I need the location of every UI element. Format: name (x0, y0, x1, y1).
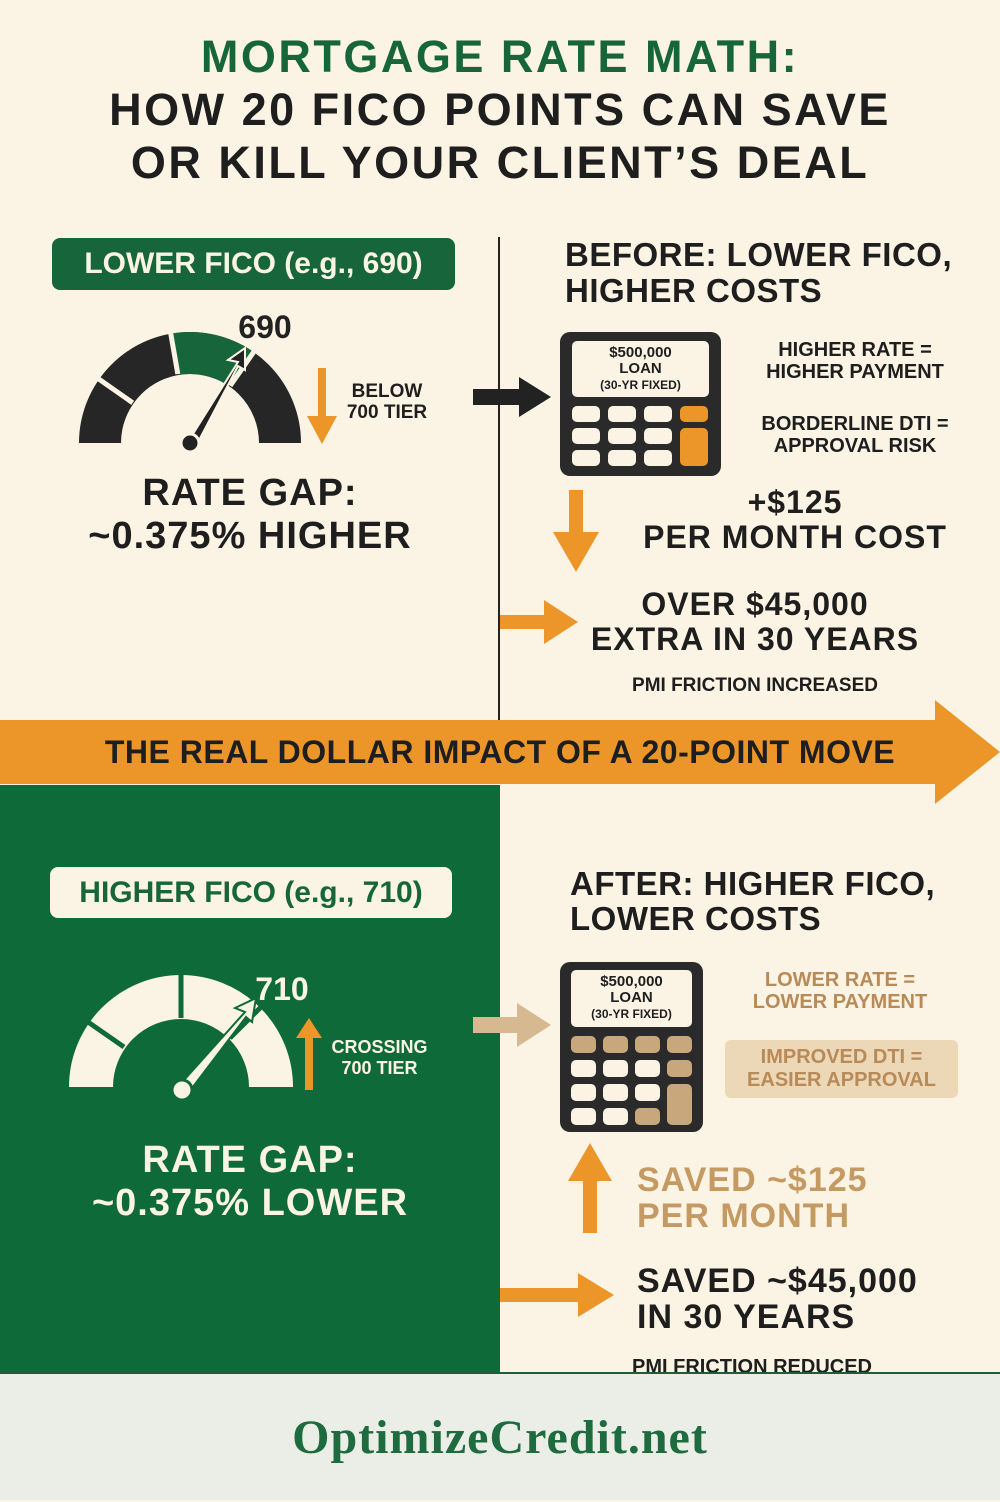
text: rate gap lower: RATE GAP: (142, 1139, 358, 1181)
text: higher rate: HIGHER PAYMENT (766, 361, 944, 383)
arrow: to calculator (473, 377, 551, 417)
icon: calculator after: (30-YR FIXED) (591, 1007, 672, 1021)
icon: calculator after: LOAN (610, 989, 653, 1006)
text: below 700 tier (347, 381, 427, 423)
heading: after: AFTER: HIGHER FICO, (570, 865, 935, 902)
text: per month cost (643, 484, 947, 555)
icon: calculator before: (30-YR FIXED) (600, 378, 681, 392)
title: HOW 20 FICO POINTS CAN SAVE (109, 84, 891, 135)
text: over 45000: OVER $45,000 (641, 586, 869, 622)
arrow: tan to calculator (473, 1003, 551, 1047)
text: pmi increased: PMI FRICTION INCREASED (632, 675, 878, 696)
pill: lower fico (52, 238, 455, 290)
text: per month cost: PER MONTH COST (643, 519, 947, 555)
arrow: down cost (553, 490, 599, 572)
title: OR KILL YOUR CLIENT’S DEAL (131, 137, 869, 188)
text: higher rate: HIGHER RATE = (778, 339, 932, 361)
pill: higher fico: HIGHER FICO (e.g., 710) (79, 876, 423, 909)
banner text: THE REAL DOLLAR IMPACT OF A 20-POINT MOVE (105, 734, 895, 770)
text: saved 45000: IN 30 YEARS (637, 1298, 855, 1336)
text: lower rate: LOWER RATE = (765, 969, 915, 991)
heading: before (565, 236, 952, 309)
banner arrow (0, 700, 1000, 804)
text: saved per month: PER MONTH (637, 1197, 850, 1235)
icon: calculator after: $500,000 (600, 973, 663, 990)
callout: improved dti (725, 1040, 958, 1098)
text: rate gap lower: ~0.375% LOWER (92, 1182, 408, 1224)
text: saved per month: SAVED ~$125 (637, 1161, 868, 1199)
icon: gauge 690 (79, 309, 301, 450)
arrow: right extra (500, 600, 578, 644)
text: crossing tier: CROSSING (331, 1037, 428, 1057)
arrow: up saved (568, 1143, 612, 1233)
heading: after: LOWER COSTS (570, 900, 821, 937)
text: rate gap higher: RATE GAP: (142, 472, 358, 514)
footer: OptimizeCredit.net (292, 1411, 708, 1464)
arrow: up crossing (296, 1018, 322, 1090)
text: over 45000: EXTRA IN 30 YEARS (591, 621, 919, 657)
icon: gauge 710: 710 (255, 971, 309, 1007)
pill: lower fico: LOWER FICO (e.g., 690) (84, 247, 423, 280)
text: borderline dti: BORDERLINE DTI = (761, 413, 949, 435)
text: saved per month (637, 1161, 868, 1235)
text: below 700 tier: BELOW (352, 381, 422, 402)
icon: calculator before: LOAN (619, 360, 662, 377)
icon: gauge 690: 690 (238, 309, 292, 345)
bottom green panel (0, 785, 500, 1375)
text: below 700 tier: 700 TIER (347, 402, 427, 423)
text: saved 45000: SAVED ~$45,000 (637, 1262, 918, 1300)
text: saved 45000 (637, 1262, 918, 1336)
text: pmi reduced: PMI FRICTION REDUCED (632, 1356, 872, 1378)
icon: calculator before: $500,000 (609, 344, 672, 361)
text: borderline dti (761, 413, 949, 457)
text: rate gap lower (92, 1139, 408, 1224)
heading: before: HIGHER COSTS (565, 272, 822, 309)
footer (0, 1372, 1000, 1500)
icon: calculator before (560, 332, 721, 476)
heading: before: BEFORE: LOWER FICO, (565, 236, 952, 273)
text: lower rate: LOWER PAYMENT (753, 991, 927, 1013)
arrow: down below tier (307, 368, 337, 444)
text: rate gap higher: ~0.375% HIGHER (88, 515, 412, 557)
text: higher rate (766, 339, 944, 383)
text: per month cost: +$125 (748, 484, 842, 520)
text: borderline dti: APPROVAL RISK (774, 435, 936, 457)
arrow: right saved (500, 1273, 614, 1317)
text: over 45000 (591, 586, 919, 657)
text: lower rate (753, 969, 927, 1013)
icon: calculator after (560, 962, 703, 1132)
text: rate gap higher (88, 472, 412, 557)
title: MORTGAGE RATE MATH: (201, 31, 799, 82)
text: crossing tier: 700 TIER (341, 1058, 418, 1078)
title (109, 31, 891, 188)
callout: improved dti: EASIER APPROVAL (747, 1069, 936, 1091)
heading: after (570, 865, 935, 937)
pill: higher fico (50, 867, 452, 918)
callout: improved dti: IMPROVED DTI = (761, 1046, 922, 1068)
text: crossing tier (331, 1037, 428, 1078)
icon: gauge 710 (69, 971, 309, 1098)
